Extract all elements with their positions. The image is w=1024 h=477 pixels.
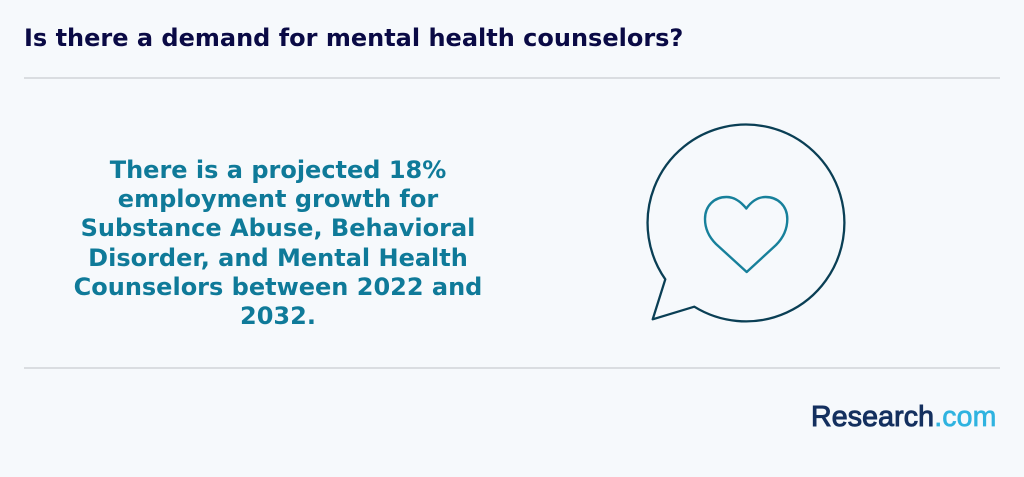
- logo: Research.com: Research.com: [811, 401, 997, 433]
- text block: employment growth statement: employment growth for: [118, 185, 438, 213]
- icon: speech bubble outline: [648, 124, 844, 321]
- text block: employment growth statement: Substance Abuse, Behavioral: [81, 214, 475, 242]
- text block: employment growth statement: There is a projected 18%: [110, 156, 446, 184]
- title: Is there a demand for mental health counselors?: [24, 24, 683, 52]
- text block: employment growth statement: Counselors between 2022 and: [74, 273, 482, 301]
- text block: employment growth statement: Disorder, and Mental Health: [88, 244, 468, 272]
- text block: employment growth statement: 2032.: [240, 302, 316, 330]
- icon: speech bubble with heart: [646, 123, 846, 322]
- text block: employment growth statement: [74, 156, 482, 330]
- icon: heart: [705, 197, 787, 272]
